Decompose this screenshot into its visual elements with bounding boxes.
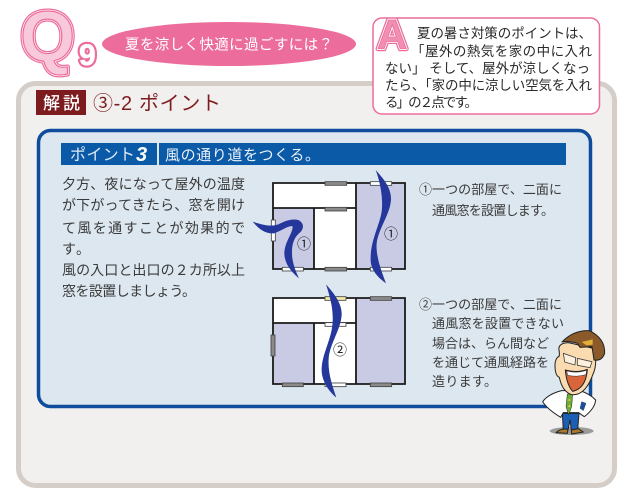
heading bar: point 3: 3	[136, 144, 147, 166]
floor plan 2: ②	[333, 342, 347, 358]
question banner: 夏を涼しく快適に過ごすには？	[125, 36, 333, 54]
floor plan 1	[253, 170, 405, 283]
answer text: たら、「家の中に涼しい空気を入れ	[385, 78, 592, 93]
arrow: wind through right room	[371, 170, 391, 283]
icon: letter A: A	[377, 11, 407, 58]
icon: letter Q with number 9: Q	[20, 0, 75, 77]
answer text: 「屋外の熱気を家の中に入れ	[411, 44, 592, 59]
body text: 窓を設置しましょう。	[62, 283, 196, 299]
caption 2: ②一つの部屋で、二面に	[419, 297, 562, 312]
answer text: 夏の暑さ対策のポイントは、	[417, 25, 592, 41]
floor plan 2	[271, 284, 405, 398]
caption 1: ①一つの部屋で、二面に	[419, 182, 562, 197]
question banner	[102, 22, 356, 66]
icon: smiling man with glasses	[543, 331, 605, 435]
panel: answer box	[373, 11, 600, 114]
heading: point title: ③-2 ポイント	[93, 92, 221, 115]
floor plan 1: ①	[297, 236, 311, 252]
floor plan 1: ①	[384, 226, 398, 242]
caption 2: 通風窓を設置できない	[432, 316, 564, 331]
caption 2: を通じて通風経路を	[432, 355, 549, 370]
icon: letter Q with number 9: Q	[20, 0, 75, 77]
body text	[62, 176, 245, 299]
body text: が下がってきたら、窓を開け	[62, 197, 245, 213]
answer text: ない」 そして、屋外が涼しくなっ	[385, 61, 590, 76]
icon: letter A: A	[377, 11, 407, 58]
heading bar: point 3: 風の通り道をつくる。	[165, 147, 320, 164]
arrow: wind through left room	[253, 219, 303, 278]
heading: explanation label: 解説	[43, 94, 80, 113]
caption 1	[419, 182, 562, 218]
icon: letter Q with number 9: 9	[79, 39, 96, 72]
caption 1: 通風窓を設置します。	[432, 203, 554, 218]
body text: す。	[62, 241, 90, 257]
caption 2: 造ります。	[432, 374, 497, 389]
body text: 夕方、夜になって屋外の温度	[62, 176, 245, 192]
body text: て風を通すことが効果的で	[62, 220, 245, 236]
icon: letter Q with number 9: 9	[79, 39, 96, 72]
heading bar: point 3	[61, 143, 566, 166]
body text: 風の入口と出口の２カ所以上	[62, 262, 245, 278]
icon: letter A: A	[377, 11, 407, 58]
panel: point 3	[38, 130, 590, 406]
icon: letter Q with number 9: Q	[20, 0, 75, 77]
heading bar: point 3: ポイント	[70, 146, 135, 164]
arrow: wind through central room	[322, 284, 342, 398]
panel: explanation background	[18, 84, 614, 486]
answer text	[385, 25, 592, 110]
answer text: る」の２点です。	[385, 95, 478, 110]
caption 2: 場合は、らん間など	[432, 336, 549, 351]
caption 2	[419, 297, 564, 389]
heading: explanation label	[36, 90, 86, 115]
